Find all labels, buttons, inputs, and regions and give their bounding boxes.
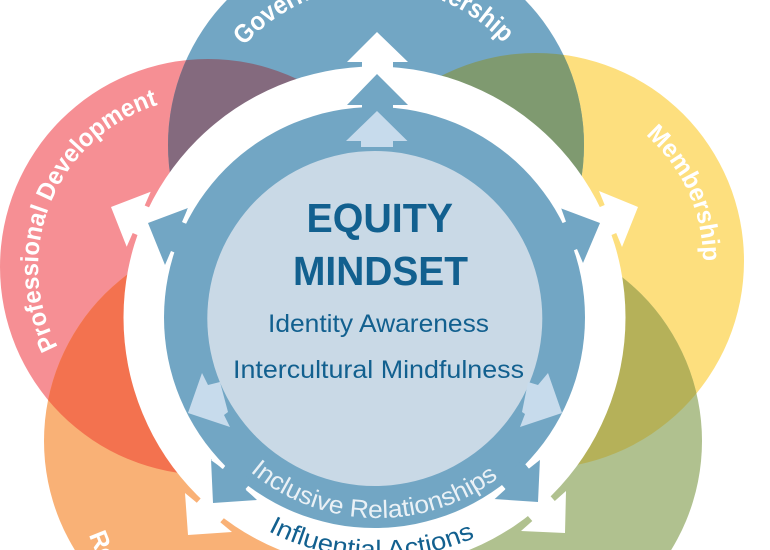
circle: professional development (0, 59, 416, 475)
inner circle (207, 151, 542, 486)
arrow: light lower right (520, 373, 562, 427)
arrow: blue right (557, 208, 600, 263)
white slits beside blue arrows (166, 208, 582, 498)
arrow: blue up (347, 74, 408, 114)
overlap: governance and membership (442, 53, 584, 176)
arrow: light up (346, 111, 408, 147)
circle: governance and leadership (168, 0, 584, 353)
circle: resources (44, 233, 460, 550)
text: intercultural mindfulness: Intercultural Mindfulness (233, 356, 524, 384)
white outer ring: influential actions (124, 66, 626, 550)
title: equity mindset (293, 195, 468, 294)
arrow: to membership (597, 191, 638, 248)
arrow: blue lower right (494, 458, 540, 502)
title: equity mindset: EQUITY (306, 195, 453, 241)
label: professional development: Professional Development (20, 90, 158, 353)
arrow: light lower left (188, 373, 230, 427)
blue arrows (148, 74, 600, 503)
overlap: membership and programs (578, 277, 696, 465)
circle: programs (286, 233, 702, 550)
blue middle ring: inclusive relationships (164, 107, 585, 528)
text: identity awareness: Identity Awareness (268, 310, 489, 338)
overlap: professional development and resources (48, 274, 178, 473)
arrow: up to governance (347, 32, 408, 72)
label: membership: Membership (647, 124, 720, 260)
label: inclusive relationships: Inclusive Relationships (252, 460, 496, 518)
arrow: to professional development (111, 192, 152, 247)
arrow: to programs (520, 490, 566, 533)
arrow: to resources (185, 492, 233, 535)
title: equity mindset: MINDSET (293, 248, 468, 294)
overlap: governance and professional development (168, 59, 296, 172)
arrow: blue lower left (211, 459, 257, 503)
arrow: blue left (148, 208, 191, 265)
circle: membership (328, 53, 744, 469)
white arrows (111, 32, 638, 535)
